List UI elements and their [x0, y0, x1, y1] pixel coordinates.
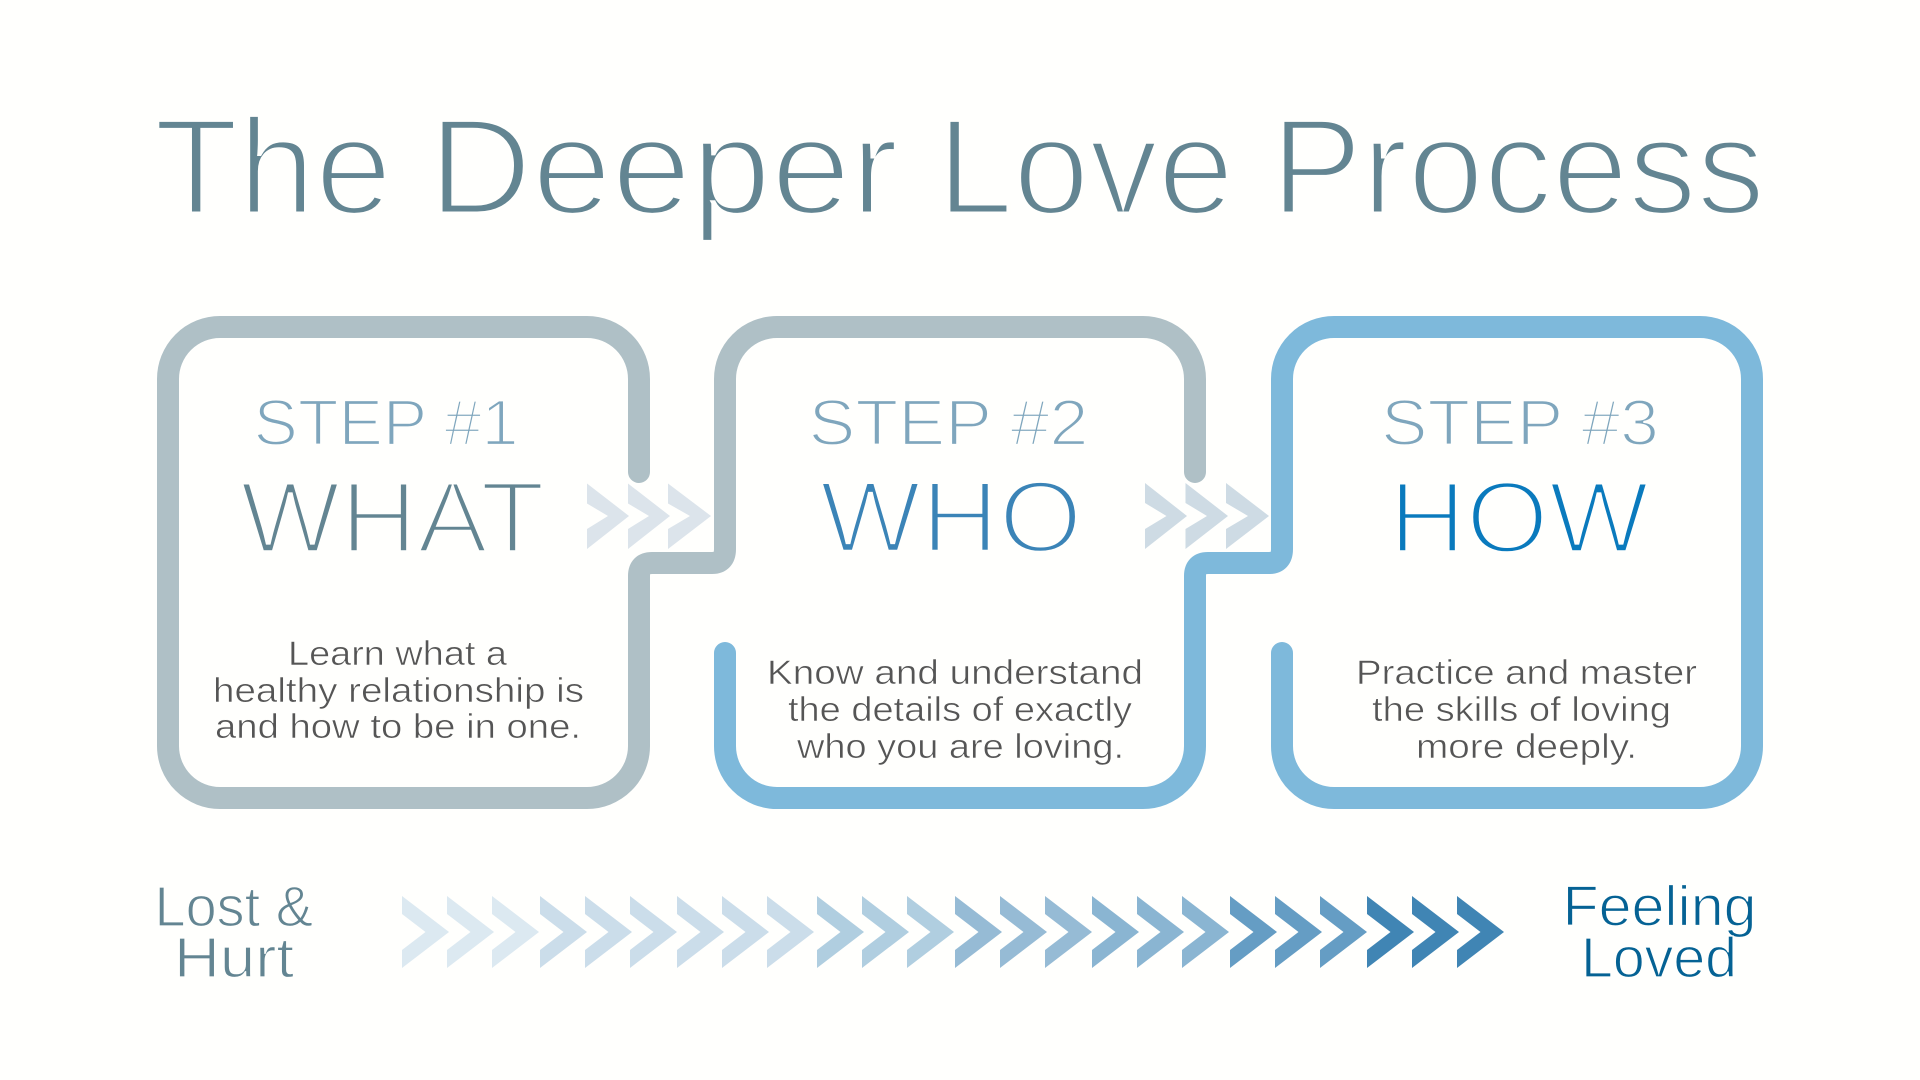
- step 1 description: Learn what a: [288, 635, 508, 673]
- step 1 label: STEP #1: [254, 386, 518, 459]
- panel: step 1: [213, 386, 584, 746]
- end label: Feeling Loved: Loved: [1581, 927, 1737, 990]
- title: Deeper: [428, 90, 898, 243]
- panel: step 2: [767, 386, 1143, 766]
- step 3 heading: HOW: [1389, 460, 1649, 574]
- arrows: step 2 to step 3: [1145, 483, 1269, 549]
- title: Love: [937, 90, 1234, 243]
- step 2 description: who you are loving.: [796, 728, 1124, 766]
- step 3 description: more deeply.: [1416, 728, 1637, 766]
- step 3 description: Practice and master: [1356, 654, 1697, 692]
- step 2 description: [767, 654, 1143, 766]
- end label: Feeling Loved: [1562, 876, 1756, 990]
- step 1 heading: WHAT: [240, 460, 545, 574]
- arrows: step 1 to step 2: [587, 484, 711, 549]
- panel: step 3: [1356, 386, 1697, 766]
- step 1 description: healthy relationship is: [213, 672, 584, 710]
- connector outline: blue path around bottom of step 2 and step 3: [725, 327, 1752, 798]
- step 2 heading: WHO: [820, 460, 1082, 574]
- step 1 description: [213, 635, 584, 746]
- step 3 description: the skills of loving: [1372, 691, 1671, 729]
- title: [154, 90, 1765, 243]
- step 3 description: [1356, 654, 1697, 766]
- step 2 label: STEP #2: [808, 386, 1088, 459]
- start label: Lost and Hurt: [154, 876, 313, 990]
- title: Process: [1271, 90, 1765, 243]
- step 3 label: STEP #3: [1381, 386, 1659, 459]
- progress arrows: from lost to loved: [402, 896, 1504, 968]
- title: The: [154, 90, 392, 243]
- start label: Lost and Hurt: Lost &: [154, 876, 313, 939]
- step 2 description: Know and understand: [767, 654, 1143, 692]
- connector outline: grey path around step 1 and top of step 2: [168, 327, 1195, 798]
- start label: Lost and Hurt: Hurt: [174, 927, 294, 990]
- step 2 description: the details of exactly: [788, 691, 1133, 729]
- step 1 description: and how to be in one.: [215, 708, 581, 746]
- end label: Feeling Loved: Feeling: [1562, 876, 1756, 938]
